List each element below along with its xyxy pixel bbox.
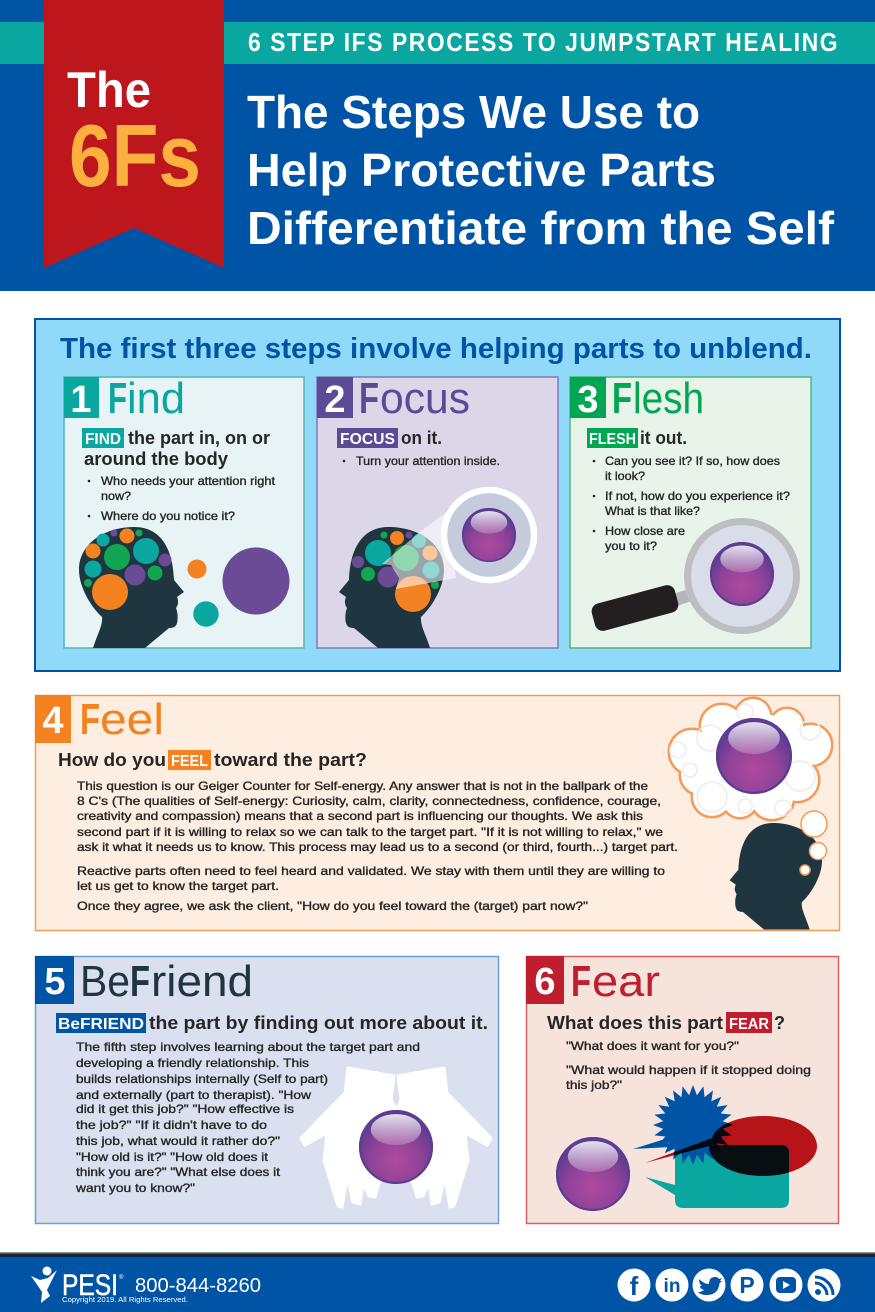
panel: first three steps bbox=[35, 319, 840, 671]
body text: think you are?" "What else does it bbox=[76, 1165, 281, 1179]
subheading: the part by finding out more about it. bbox=[149, 1013, 488, 1033]
body text: did it get this job?" "How effective is bbox=[76, 1102, 294, 1116]
social icons: f bbox=[630, 1271, 639, 1301]
subheading: How do you bbox=[58, 750, 166, 770]
bullets: What is that like? bbox=[605, 504, 700, 518]
body text: this job, what would it rather do?" bbox=[76, 1134, 280, 1148]
card 2: Focus: F bbox=[359, 374, 379, 423]
bullets: it look? bbox=[605, 469, 645, 483]
bullets: you to it? bbox=[605, 539, 657, 553]
panel 4: Feel: 4 bbox=[42, 700, 64, 742]
body text: Once they agree, we ask the client, "How do you feel toward the (target) part now?" bbox=[77, 899, 588, 913]
ribbon: The 6Fs: 6Fs bbox=[69, 106, 201, 205]
logo: 800-844-8260 bbox=[135, 1275, 261, 1297]
body text bbox=[75, 1040, 420, 1195]
card 1: Find: 1 bbox=[70, 379, 92, 421]
title: The Steps We Use to bbox=[247, 86, 700, 138]
body text: let us get to know the target part. bbox=[77, 879, 279, 893]
panel 5: BeFriend: F bbox=[130, 957, 150, 1006]
logo: ® bbox=[119, 1274, 124, 1281]
panel 6: Fear: ear bbox=[592, 957, 660, 1006]
card 3: Flesh bbox=[570, 374, 811, 648]
title: Differentiate from the Self bbox=[247, 202, 835, 254]
panel 5: BeFriend: Be bbox=[80, 957, 130, 1006]
panel 6: Fear bbox=[526, 956, 838, 1224]
body text: ask it what it needs us to know. This process may lead us to a second (or third, fourth...) target part. bbox=[77, 840, 678, 854]
icon: head with parts bbox=[79, 527, 184, 648]
icon: thought cloud with sphere bbox=[669, 698, 832, 820]
icon: magnifying glass bbox=[590, 522, 796, 633]
icon: head with thought bubbles bbox=[730, 811, 827, 929]
icon: head with focus beam bbox=[339, 510, 456, 648]
panel 6: Fear: 6 bbox=[534, 961, 556, 1003]
header banner bbox=[0, 0, 875, 291]
bullet: Turn your attention inside. bbox=[356, 454, 500, 468]
card 3: Flesh: 3 bbox=[577, 379, 599, 421]
body text: This question is our Geiger Counter for Self-energy. Any answer that is not in the ballpark of the bbox=[77, 779, 648, 793]
subheading: FIND bbox=[85, 431, 121, 448]
body text: Reactive parts often need to feel heard and validated. We stay with them until they are willing to bbox=[77, 864, 666, 878]
body text: The fifth step involves learning about the target part and bbox=[76, 1040, 420, 1054]
subheading bbox=[58, 750, 367, 770]
panel 5: BeFriend bbox=[35, 956, 498, 1224]
bullets bbox=[593, 454, 790, 553]
subtitle: 6 STEP IFS PROCESS TO JUMPSTART HEALING bbox=[248, 29, 838, 57]
footer bbox=[0, 1252, 875, 1312]
body text: developing a friendly relationship. This bbox=[76, 1056, 309, 1070]
subheading: FLESH bbox=[589, 431, 636, 448]
subheading: on it. bbox=[401, 428, 442, 448]
body text: the job?" "If it didn't have to do bbox=[76, 1118, 268, 1132]
body text: "What does it want for you?" bbox=[566, 1039, 739, 1053]
panel 6: Fear: F bbox=[571, 957, 591, 1006]
panel 4: Feel: eel bbox=[100, 695, 164, 744]
title bbox=[247, 86, 835, 254]
subheading: the part in, on or bbox=[128, 428, 270, 448]
subheading: around the body bbox=[84, 449, 228, 469]
body text: this job?" bbox=[566, 1078, 622, 1092]
body text bbox=[77, 779, 678, 913]
subheading: FEEL bbox=[171, 753, 208, 770]
subheading: ? bbox=[774, 1013, 785, 1033]
body text: builds relationships internally (Self to part) bbox=[76, 1072, 328, 1086]
bullets bbox=[88, 474, 276, 523]
card 3: Flesh: F bbox=[612, 374, 632, 423]
card 2: Focus: ocus bbox=[380, 374, 470, 423]
body text: creativity and compassion) means that a second part is influencing our thoughts. We ask this bbox=[77, 809, 643, 823]
icon: sphere in hands bbox=[359, 1110, 433, 1184]
social icons: in bbox=[664, 1276, 680, 1297]
body text: second part if it is willing to relax so we can talk to the target part. "If it is not willing to relax," we bbox=[77, 825, 664, 839]
panel 4: Feel bbox=[35, 695, 840, 930]
icon: sphere bbox=[556, 1137, 630, 1211]
panel 5: BeFriend: riend bbox=[151, 957, 253, 1006]
subheading bbox=[547, 1012, 785, 1033]
panel heading: The first three steps involve helping parts to unblend. bbox=[60, 333, 812, 365]
subheading: What does this part bbox=[547, 1013, 723, 1033]
subheading: FOCUS bbox=[340, 431, 395, 448]
icon: speech bubbles bbox=[633, 1085, 817, 1208]
ribbon: The 6Fs bbox=[44, 0, 224, 268]
card 1: Find: F bbox=[108, 374, 127, 423]
body text: 8 C's (The qualities of Self-energy: Curiosity, calm, clarity, connectedness, confidence, courage, bbox=[77, 794, 661, 808]
bullets: How close are bbox=[605, 524, 685, 538]
card 1: Find bbox=[64, 374, 304, 648]
card 2: Focus: 2 bbox=[324, 379, 346, 421]
card 2: Focus bbox=[317, 374, 558, 648]
social icons bbox=[618, 1268, 840, 1302]
body text: "What would happen if it stopped doing bbox=[566, 1063, 811, 1077]
logo bbox=[31, 1266, 261, 1304]
icon: open hands bbox=[301, 1068, 491, 1207]
ribbon: The 6Fs: The bbox=[67, 62, 151, 118]
icon: separated parts bbox=[188, 548, 290, 627]
subheading: it out. bbox=[640, 428, 687, 448]
subheading bbox=[82, 428, 270, 469]
bullets: Can you see it? If so, how does bbox=[605, 454, 780, 468]
body text bbox=[566, 1039, 811, 1092]
bullets: Who needs your attention right bbox=[101, 474, 276, 488]
subheading: FEAR bbox=[729, 1016, 769, 1033]
bullets: If not, how do you experience it? bbox=[605, 489, 790, 503]
body text: "How old is it?" "How old does it bbox=[76, 1150, 269, 1164]
body text: want you to know?" bbox=[75, 1181, 195, 1195]
body text: and externally (part to therapist). "How bbox=[76, 1088, 312, 1102]
card 3: Flesh: lesh bbox=[633, 374, 704, 423]
bullets: Where do you notice it? bbox=[101, 509, 235, 523]
subheading bbox=[587, 428, 687, 448]
bullets: now? bbox=[101, 489, 131, 503]
logo: PESI bbox=[62, 1269, 118, 1302]
title: Help Protective Parts bbox=[247, 144, 716, 196]
panel 5: BeFriend: 5 bbox=[44, 961, 66, 1003]
icon: lens with sphere bbox=[444, 490, 534, 580]
subheading: toward the part? bbox=[214, 750, 367, 770]
card 1: Find: ind bbox=[127, 374, 185, 423]
subheading: BeFRIEND bbox=[58, 1016, 144, 1033]
logo: Copyright 2019. All Rights Reserved. bbox=[62, 1297, 188, 1304]
panel 4: Feel: F bbox=[80, 695, 100, 744]
social icons: P bbox=[739, 1272, 755, 1298]
subheading bbox=[337, 428, 442, 448]
